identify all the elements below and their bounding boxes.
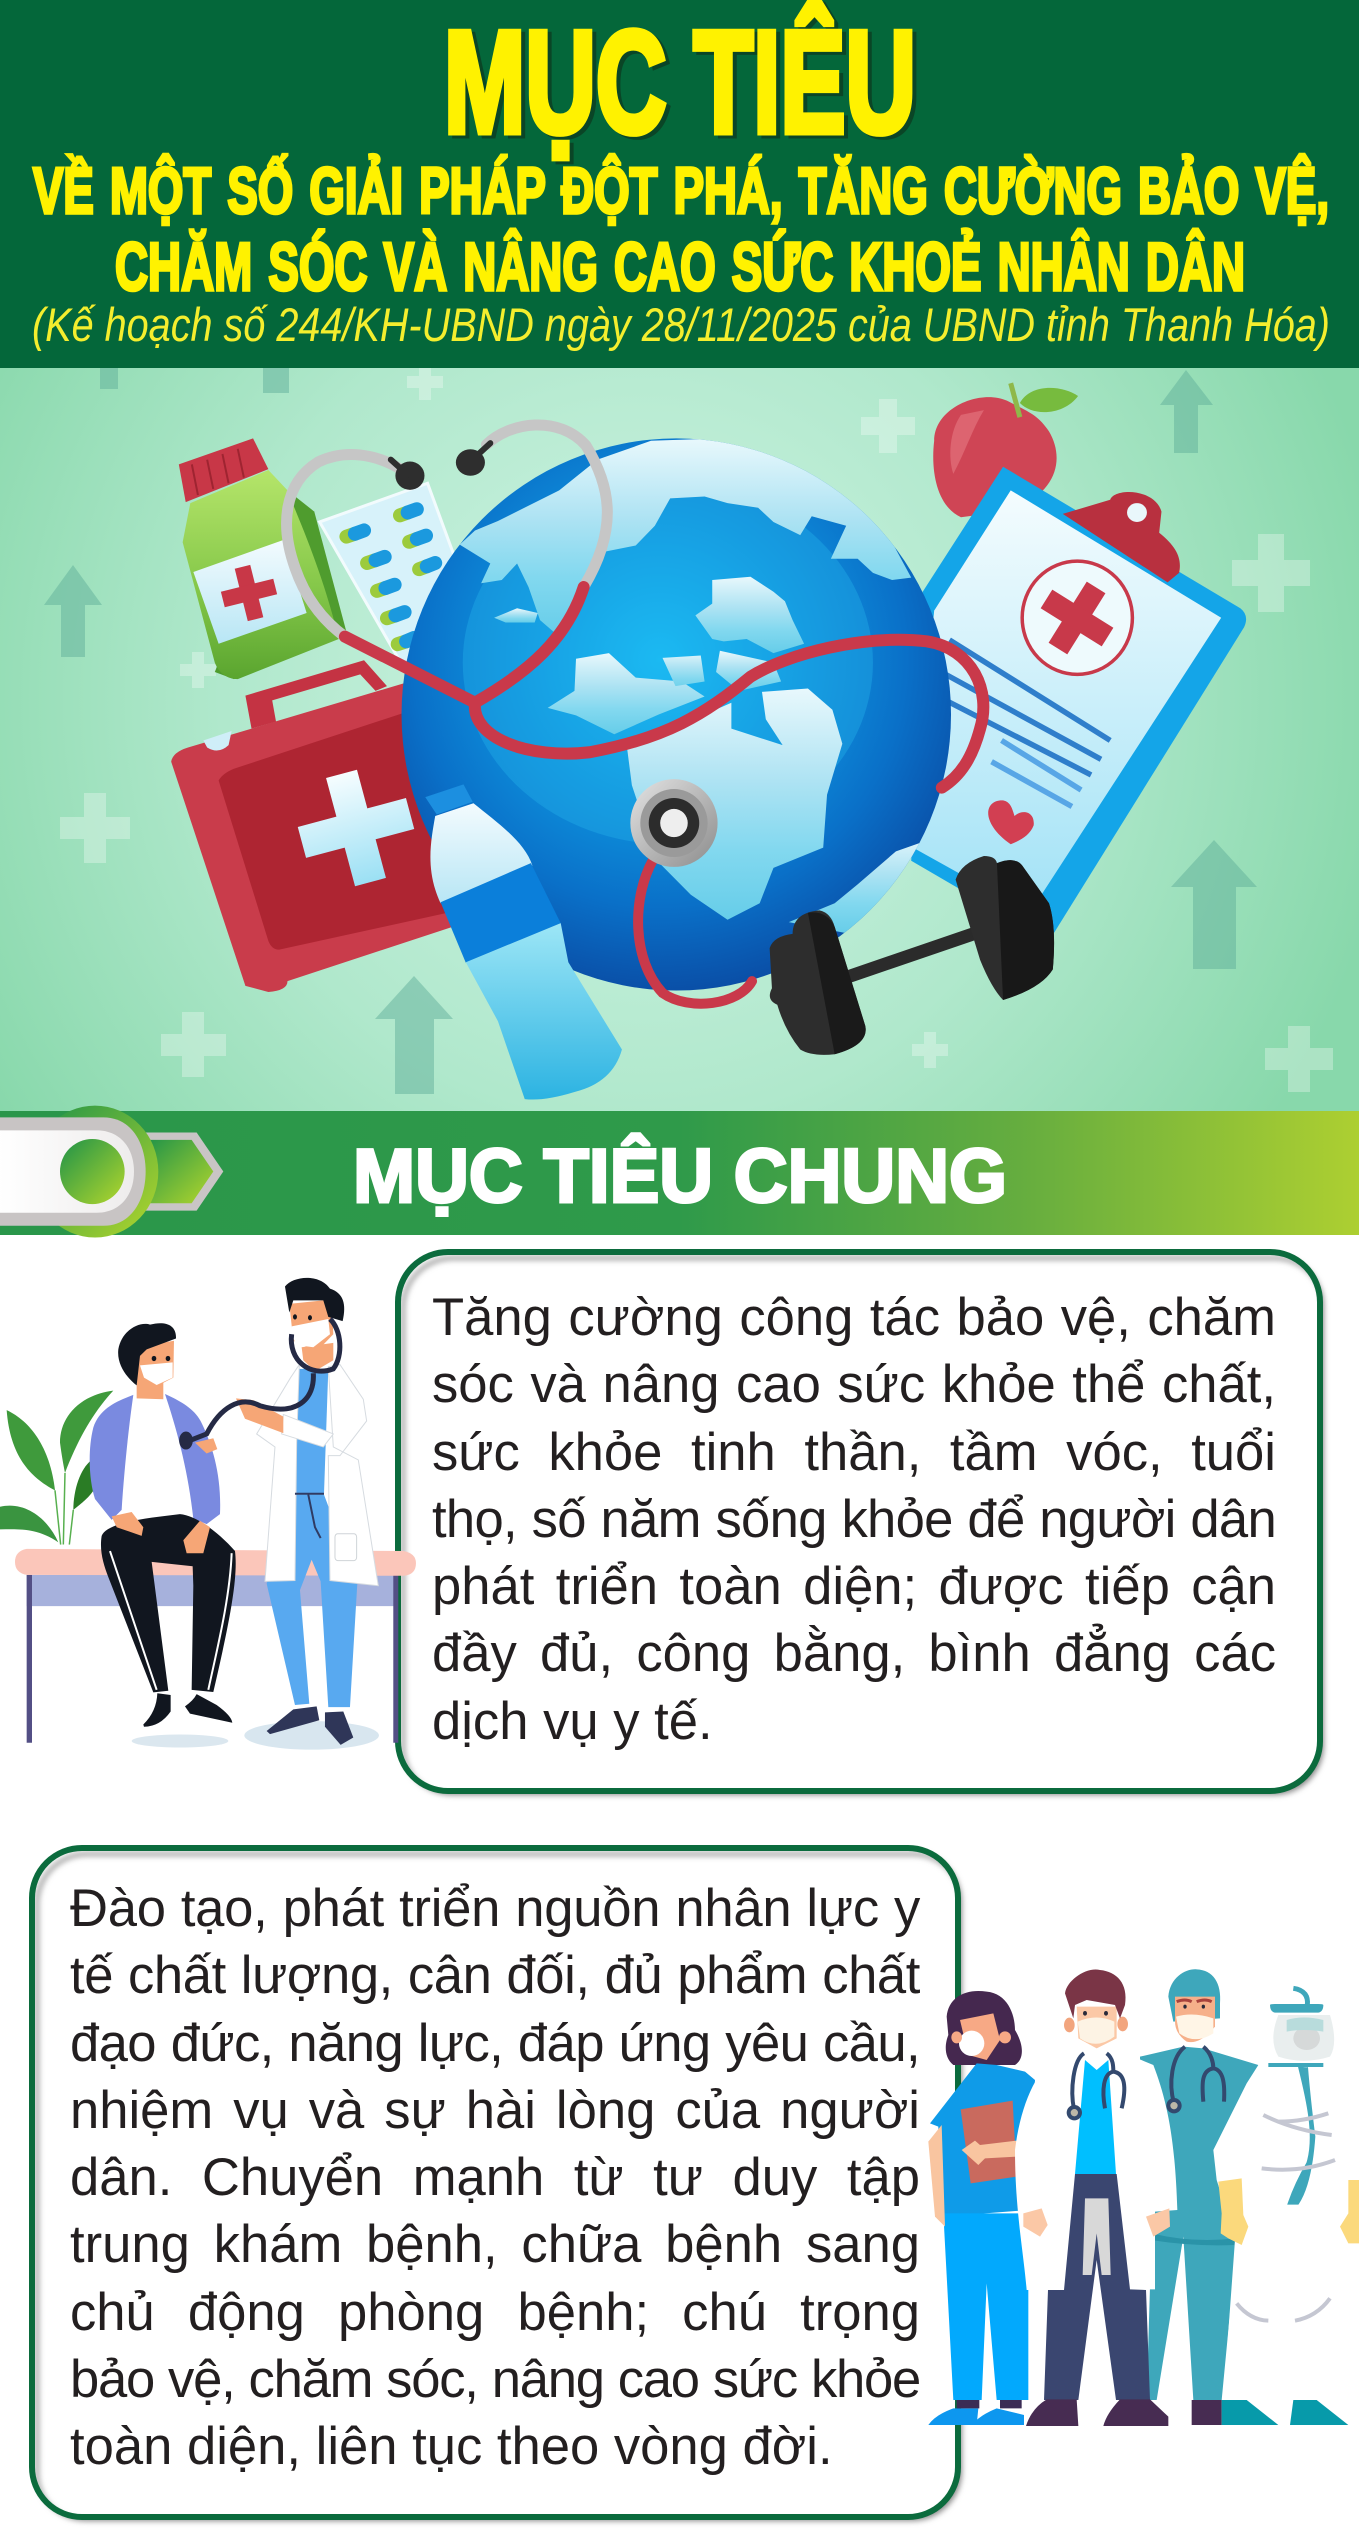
continents	[460, 438, 949, 934]
text block: card 2: chủ động phòng bệnh; chú trọng	[70, 2283, 920, 2342]
patient	[90, 1323, 236, 1727]
icon: medicine bottle	[179, 438, 346, 679]
stethoscope chest piece	[630, 779, 718, 867]
icon: stethoscope	[287, 425, 983, 1004]
text block: card 2: dân. Chuyển mạnh từ tư duy tập	[70, 2148, 920, 2207]
text block: card 1: Tăng cường công tác bảo vệ, chăm	[432, 1288, 1276, 1347]
text block: card 2: toàn diện, liên tục theo vòng đời.	[70, 2417, 833, 2476]
text block: card 2: nhiệm vụ và sự hài lòng của người	[70, 2081, 920, 2140]
hero illustration panel	[0, 368, 1359, 1111]
background arrows	[44, 368, 1257, 1094]
icon: dumbbell	[770, 856, 1054, 1055]
banner heading: MỤC TIÊU CHUNG	[353, 1133, 1007, 1219]
illustration: doctor examining patient	[0, 1278, 416, 1750]
icon: water bottle	[425, 784, 622, 1100]
icon: pill blister pack	[320, 483, 467, 672]
panel: general objective card 1	[395, 1249, 1328, 1799]
text block: card 1: dịch vụ y tế.	[432, 1692, 713, 1751]
icon: globe	[402, 438, 951, 991]
background plus signs	[60, 368, 1333, 1092]
text block: card 1: sức khỏe tinh thần, tầm vóc, tuổi	[432, 1423, 1276, 1482]
text block: card 2: bảo vệ, chăm sóc, nâng cao sức khỏe	[70, 2350, 920, 2409]
text block: card 1: phát triển toàn diện; được tiếp cận	[432, 1557, 1276, 1616]
clipboard cross	[1027, 568, 1127, 668]
icon: first aid kit	[171, 660, 460, 992]
doctor stethoscope	[182, 1319, 340, 1447]
icon: clipboard	[911, 467, 1246, 941]
main illustration group	[171, 383, 1246, 1100]
plant	[0, 1391, 113, 1545]
text block: card 2: tế chất lượng, cân đối, đủ phẩm chất	[70, 1946, 920, 2005]
kit cross	[287, 759, 425, 897]
protective suit worker	[1213, 1988, 1359, 2425]
panel: general objective card 2	[29, 1845, 966, 2525]
text block: card 1: đầy đủ, công bằng, bình đẳng các	[432, 1624, 1276, 1683]
doctor	[182, 1278, 378, 1745]
title: MỤC TIÊU	[444, 1, 916, 163]
bench	[15, 1549, 416, 1750]
text block: card 2: Đào tạo, phát triển nguồn nhân lực y	[70, 1879, 920, 1938]
nurse with teal cap	[1140, 1969, 1258, 2425]
header band	[0, 0, 1359, 368]
text block: card 2: đạo đức, năng lực, đáp ứng yêu cầu,	[70, 2014, 920, 2073]
banner icon: toggle arrow	[0, 1106, 223, 1237]
doctor in white coat	[1015, 1969, 1177, 2426]
section banner	[0, 1106, 1359, 1238]
nurse with clipboard	[928, 1991, 1035, 2425]
text block: card 1	[432, 1288, 1276, 1751]
text block: card 1: sóc và nâng cao sức khỏe thể chất,	[432, 1355, 1276, 1414]
subtitle	[33, 154, 1329, 305]
stethoscope	[1168, 2047, 1224, 2111]
icon: apple	[933, 383, 1078, 517]
text block: card 2	[70, 1879, 920, 2476]
text block: card 2: trung khám bệnh, chữa bệnh sang	[70, 2215, 920, 2274]
illustration: medical staff group	[928, 1969, 1359, 2426]
stethoscope	[1069, 2053, 1124, 2118]
text block: card 1: thọ, số năm sống khỏe để người dân	[432, 1490, 1276, 1549]
bottle cross	[216, 560, 282, 626]
